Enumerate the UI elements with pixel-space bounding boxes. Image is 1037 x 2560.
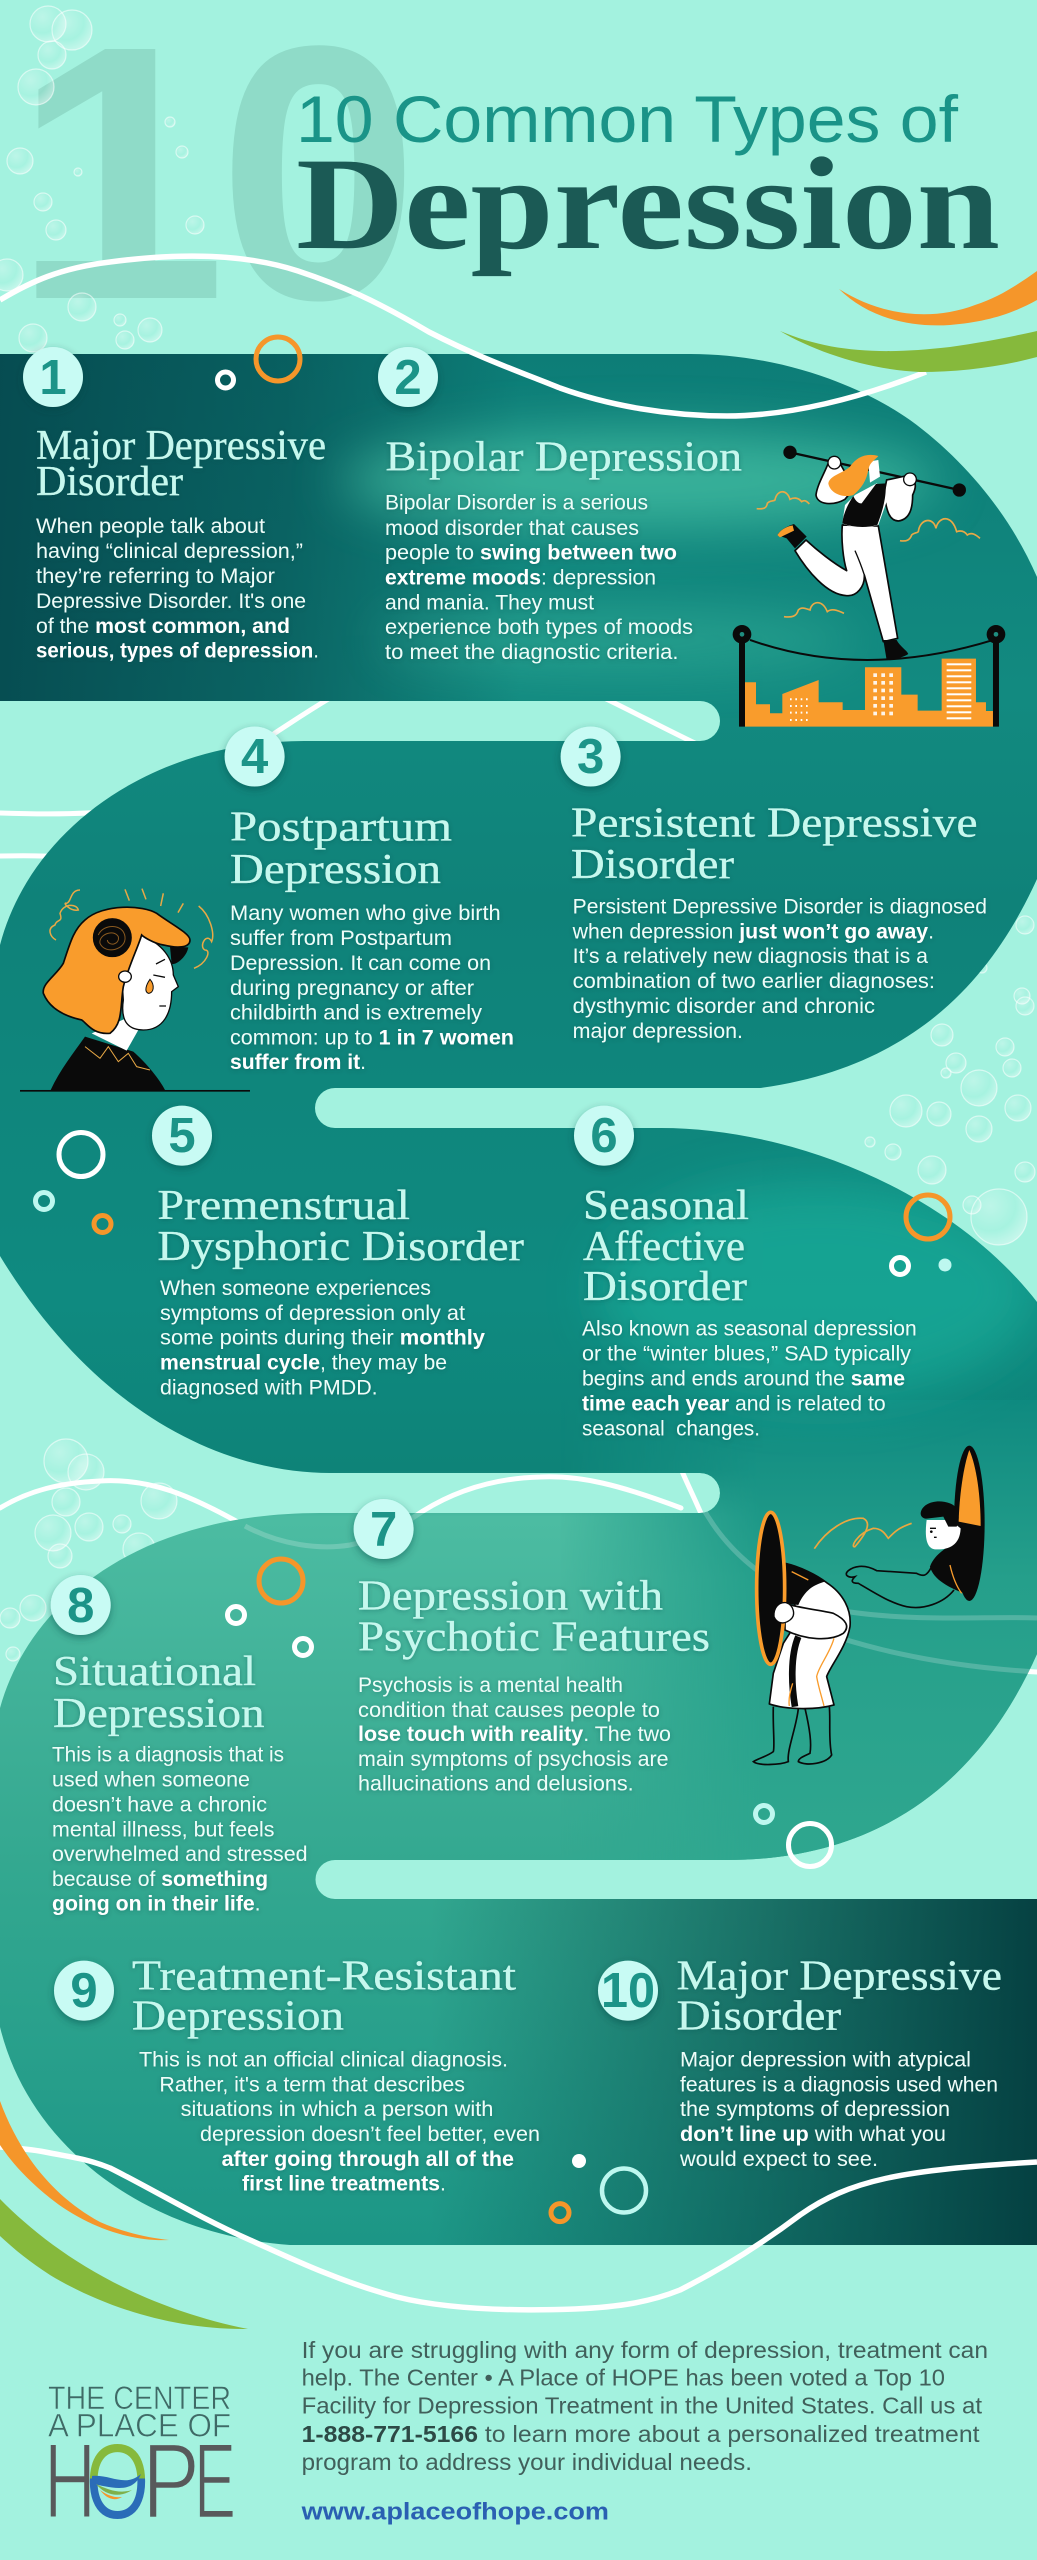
heading: Depression [230, 847, 441, 893]
number badge 1 [23, 347, 83, 407]
figure [795, 525, 898, 642]
body text: symptoms of depression only at [160, 1302, 465, 1325]
clouds [757, 492, 980, 617]
snake shaped teal panel background [0, 354, 1037, 2245]
panel 9: treatment-resistant depression [54, 1954, 646, 2222]
logo: the center a place of hope: E [194, 2420, 236, 2541]
body text: childbirth and is extremely [230, 1001, 483, 1024]
heading: Treatment-Resistant [132, 1954, 516, 2000]
body text: don’t line up with what you [680, 2123, 946, 2146]
logo: the center a place of hope [44, 2380, 236, 2541]
heading [677, 1954, 1002, 2040]
body text: or the “winter blues,” SAD typically [582, 1343, 912, 1366]
heading: Situational [53, 1649, 256, 1695]
body text: going on in their life. [52, 1893, 261, 1916]
body text: Psychosis is a mental health [358, 1674, 623, 1697]
body text: dysthymic disorder and chronic [573, 995, 875, 1018]
logo: the center a place of hope: P [142, 2420, 200, 2541]
body text: some points during their monthly [160, 1326, 485, 1349]
pole [790, 452, 959, 490]
footer text block: program to address your individual needs. [302, 2449, 752, 2475]
orange swoosh top right [839, 271, 1037, 325]
body text: used when someone [52, 1768, 250, 1791]
heading: Disorder [36, 459, 183, 505]
heading: Disorder [571, 842, 734, 888]
heading [358, 1574, 710, 1661]
illustration: woman on tightrope above city [733, 446, 1005, 727]
body text: diagnosed with PMDD. [160, 1376, 378, 1399]
pants and back [769, 1563, 850, 1709]
body text: main symptoms of psychosis are [358, 1748, 669, 1771]
heading: Depression with [358, 1574, 663, 1620]
body text: When people talk about [36, 515, 265, 538]
body text: having “clinical depression,” [36, 540, 303, 563]
body text: This is a diagnosis that is [52, 1743, 284, 1766]
body text: It’s a relatively new diagnosis that is a [573, 945, 928, 968]
main title [296, 82, 1000, 277]
footer text block [302, 2337, 988, 2475]
body text: depression doesn’t feel better, even [200, 2123, 540, 2146]
decorative rings [892, 1195, 952, 1274]
logo: the center a place of hope: H [44, 2420, 96, 2541]
panel 10: major depressive disorder [598, 1954, 1002, 2171]
heading [571, 801, 978, 888]
body text: the symptoms of depression [680, 2098, 950, 2121]
number badge 8 [51, 1575, 111, 1635]
heading: Psychotic Features [358, 1615, 710, 1661]
heading: Dysphoric Disorder [157, 1224, 524, 1270]
body text: extreme moods: depression [385, 566, 656, 590]
title line 2: Depression [296, 130, 1000, 277]
heading: Persistent Depressive [571, 801, 978, 847]
panel 1: major depressive disorder [23, 337, 326, 662]
number badge 9 [54, 1961, 114, 2021]
body text: would expect to see. [679, 2148, 878, 2171]
heading: Major Depressive [677, 1954, 1002, 2000]
heading [583, 1183, 749, 1310]
heading [36, 423, 326, 505]
body text: because of something [52, 1868, 268, 1891]
body text: people to swing between two [385, 542, 677, 565]
heading: Seasonal [583, 1183, 749, 1229]
body text: first line treatments. [242, 2172, 446, 2196]
body text: Also known as seasonal depression [582, 1318, 917, 1341]
illustration: crying woman with scribble in her head [20, 889, 250, 1092]
body text: overwhelmed and stressed [52, 1843, 308, 1866]
green swoosh top right [780, 331, 1037, 372]
body text [679, 2048, 998, 2171]
decorative rings [218, 337, 300, 388]
body text [52, 1743, 308, 1916]
left portal [757, 1512, 785, 1664]
number badge 10: 10 [601, 1964, 655, 2018]
footer text block: 1-888-771-5166 to learn more about a personalized treatment [302, 2421, 980, 2447]
heading [157, 1183, 524, 1270]
city skyline [745, 659, 993, 727]
body text [582, 1318, 917, 1441]
body text: major depression. [573, 1020, 743, 1043]
number badge 5: 5 [168, 1109, 196, 1163]
body text [36, 515, 319, 662]
logo: the center a place of hope: A PLACE OF [48, 2408, 231, 2444]
background white wave lines [0, 696, 1037, 1672]
body text [358, 1674, 671, 1796]
body text: lose touch with reality. The two [358, 1723, 671, 1746]
panel 7: depression with psychotic features [354, 1446, 985, 1866]
heading [53, 1649, 264, 1737]
body text: to meet the diagnostic criteria. [385, 641, 678, 664]
panel 2: bipolar depression [378, 347, 1005, 727]
body text: When someone experiences [160, 1277, 431, 1300]
squiggle [814, 1518, 912, 1549]
body text: suffer from it. [230, 1051, 366, 1074]
panel 4: postpartum depression [20, 726, 514, 1092]
body text: seasonal changes. [582, 1418, 760, 1441]
heading: Disorder [677, 1994, 841, 2040]
legs [753, 1707, 832, 1765]
heading: Depression [132, 1994, 344, 2040]
body text [160, 1277, 485, 1399]
body text: common: up to 1 in 7 women [230, 1026, 514, 1049]
logo: the center a place of hope: THE CENTER [48, 2380, 231, 2416]
body text: suffer from Postpartum [230, 927, 452, 950]
body text: features is a diagnosis used when [680, 2074, 998, 2097]
heading: Depression [53, 1691, 264, 1737]
bottom white wave [0, 2147, 1037, 2310]
body text [385, 492, 693, 664]
logo: the center a place of hope: O [86, 2423, 149, 2541]
body text: Depression. It can come on [230, 952, 491, 975]
body text: combination of two earlier diagnoses: [573, 970, 935, 993]
footer text block: help. The Center • A Place of HOPE has been voted a Top 10 [302, 2365, 945, 2391]
body text: of the most common, and [36, 615, 290, 638]
panel 3: persistent depressive disorder [561, 726, 987, 1043]
top white wave [0, 256, 926, 416]
body text: doesn’t have a chronic [52, 1793, 267, 1816]
rope and posts [750, 640, 993, 660]
body text: Persistent Depressive Disorder is diagnosed [573, 896, 987, 919]
number badge 2: 2 [394, 351, 422, 405]
title line 1: 10 Common Types of [296, 82, 959, 156]
heading: Disorder [583, 1264, 747, 1310]
number badge 3: 3 [577, 730, 604, 784]
body text: serious, types of depression. [36, 640, 319, 662]
panel 6: seasonal affective disorder [574, 1106, 952, 1441]
body text: condition that causes people to [358, 1699, 660, 1722]
heading: Major Depressive [36, 423, 326, 469]
body text: they’re referring to Major [36, 565, 275, 588]
body text [230, 902, 514, 1074]
body text: Bipolar Disorder is a serious [385, 492, 648, 514]
body text: mental illness, but feels [52, 1818, 274, 1841]
body text: Major depression with atypical [680, 2048, 971, 2072]
background bubbles: left middle [0, 1439, 177, 1661]
body text: Depressive Disorder. It's one [36, 590, 306, 613]
body text: time each year and is related to [582, 1393, 886, 1416]
website link: www.aplaceofhope.com [300, 2499, 609, 2526]
panel 5: premenstrual dysphoric disorder [36, 1106, 524, 1399]
heading: Postpartum [230, 805, 452, 851]
number badge 8: 8 [67, 1579, 94, 1633]
body text: Rather, it's a term that describes [159, 2074, 465, 2097]
floor line [20, 1090, 250, 1092]
body text: when depression just won’t go away. [572, 921, 934, 944]
number badge 2 [378, 347, 438, 407]
green swoosh bottom left [0, 2199, 248, 2329]
heading [132, 1954, 516, 2040]
body text: hallucinations and delusions. [358, 1773, 634, 1796]
number badge 7 [354, 1499, 414, 1559]
decorative rings [36, 1132, 111, 1232]
number badge 3 [561, 726, 621, 786]
body text: begins and ends around the same [582, 1368, 905, 1391]
decorative rings [228, 1559, 312, 1656]
orange swoosh bottom left [0, 2101, 169, 2240]
heading [230, 805, 452, 893]
body text: menstrual cycle, they may be [160, 1351, 447, 1374]
decorative rings [756, 1806, 832, 1866]
body text: after going through all of the [222, 2148, 514, 2171]
heading: Affective [583, 1224, 745, 1270]
footer text block: Facility for Depression Treatment in the United States. Call us at [302, 2392, 982, 2418]
body text: This is not an official clinical diagnosis. [139, 2048, 508, 2072]
number badge 5 [152, 1106, 212, 1166]
right portal [954, 1446, 985, 1601]
body text: experience both types of moods [385, 616, 693, 639]
heading: Bipolar Depression [386, 434, 742, 480]
background bubbles: top left [0, 6, 204, 352]
heading: Premenstrual [157, 1183, 410, 1229]
body text [139, 2048, 540, 2196]
number badge 1: 1 [39, 351, 67, 405]
number badge 9: 9 [70, 1964, 98, 2018]
upper body emerging from portal [930, 1540, 968, 1595]
body text [572, 896, 987, 1043]
number badge 6: 6 [590, 1109, 618, 1163]
number badge 7: 7 [370, 1503, 397, 1557]
body text: Many women who give birth [230, 902, 501, 925]
body text: during pregnancy or after [230, 977, 474, 1000]
body text: and mania. They must [385, 591, 594, 614]
background bubbles: right side [865, 916, 1035, 1245]
number badge 4: 4 [241, 730, 268, 784]
body text: situations in which a person with [181, 2098, 493, 2121]
number badge 6 [574, 1106, 634, 1166]
big background numeral 10 [12, 0, 419, 375]
body text: mood disorder that causes [385, 517, 639, 540]
number badge 4 [225, 726, 285, 786]
footer text block: If you are struggling with any form of depression, treatment can [302, 2337, 988, 2363]
decorative rings [551, 2154, 646, 2222]
illustration: person reaching through portals [753, 1446, 985, 1765]
panel 8: situational depression [51, 1559, 311, 1916]
